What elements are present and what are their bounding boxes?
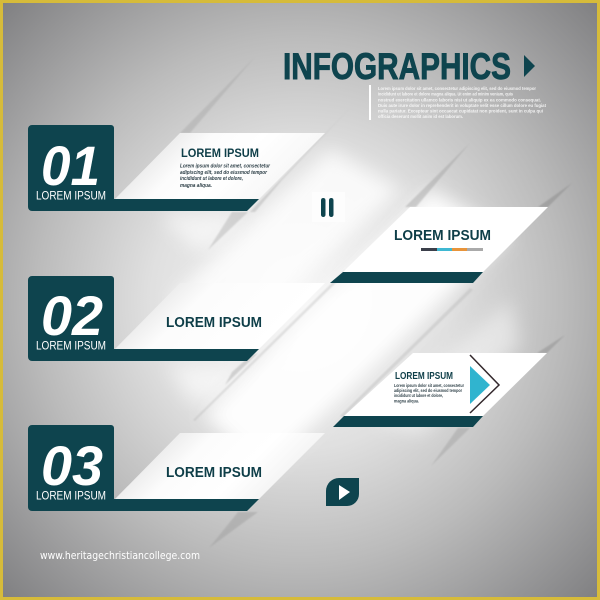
body text right lower: adipiscing elit, sed do eiusmod tempor [394, 388, 462, 393]
panel: step 01 [28, 125, 325, 211]
white ribbon 03 [115, 433, 325, 499]
heading right upper: LOREM IPSUM [394, 228, 491, 244]
teal card and bar 01 [28, 125, 259, 211]
intro text block [369, 85, 546, 120]
teal card and bar 02 [28, 276, 259, 361]
white ribbon right lower [344, 353, 547, 416]
panel: right lower [333, 353, 547, 427]
intro text block: incididunt ut labore et dolore magna aliqua. Ut enim ad minim veniam, quis [378, 92, 513, 96]
body text right lower [394, 383, 464, 404]
title: INFOGRAPHICS [283, 46, 511, 87]
icon: pause [312, 192, 345, 222]
card label 02: LOREM IPSUM [36, 338, 106, 352]
body text 01: Lorem ipsum dolor sit amet, consectetur [180, 164, 271, 170]
colour bar [421, 248, 483, 251]
icon: cyan triangle [470, 366, 490, 404]
intro text block: officia deserunt mollit anim id est laborum. [378, 114, 463, 119]
panel: right upper [330, 207, 548, 283]
website caption: www.heritagechristiancollege.com [40, 550, 200, 562]
body text 01 [180, 164, 271, 189]
body text 01: adipiscing elit, sed do eiusmod tempor [180, 170, 268, 176]
white ribbon right upper [343, 207, 548, 272]
panel: step 03 [28, 425, 325, 511]
heading 03: LOREM IPSUM [166, 465, 262, 481]
teal bar right lower [333, 416, 483, 427]
body text right lower: incididunt ut labore et dolore, [394, 393, 443, 398]
number 02: 02 [41, 284, 103, 347]
arrow: title [524, 55, 535, 77]
diagonal paper folds [160, 57, 572, 548]
card label 03: LOREM IPSUM [36, 488, 106, 502]
icon: chevron [470, 355, 499, 413]
intro text block: Duis aute irure dolor in reprehenderit in voluptate velit esse cillum dolore eu fugiat [378, 103, 546, 108]
white ribbon 02 [115, 283, 325, 349]
heading 01: LOREM IPSUM [181, 146, 259, 160]
number 03: 03 [41, 434, 103, 497]
white ribbon 01 [115, 133, 325, 199]
body text 01: incididunt ut labore et dolore, [180, 176, 243, 182]
teal card and bar 03 [28, 425, 259, 511]
heading 02: LOREM IPSUM [166, 315, 262, 331]
intro text block: nulla pariatur. Excepteur sint occaecat cupidatat non proident, sunt in culpa qui [378, 108, 543, 114]
icon: play leaf [326, 478, 359, 506]
teal bar right upper [330, 272, 483, 283]
body text right lower: magna aliqua. [394, 398, 419, 404]
card label 01: LOREM IPSUM [36, 188, 106, 202]
intro text block: nostrud exercitation ullamco laboris nisi ut aliquip ex ea commodo consequat. [378, 98, 541, 102]
body text 01: magna aliqua. [180, 183, 212, 189]
intro text block: Lorem ipsum dolor sit amet, consectetur adipiscing elit, sed do eiusmod tempor [378, 86, 536, 91]
panel: step 02 [28, 276, 325, 361]
number 01: 01 [41, 134, 100, 197]
heading right lower: LOREM IPSUM [395, 371, 453, 382]
body text right lower: Lorem ipsum dolor sit amet, consectetur [394, 383, 464, 388]
